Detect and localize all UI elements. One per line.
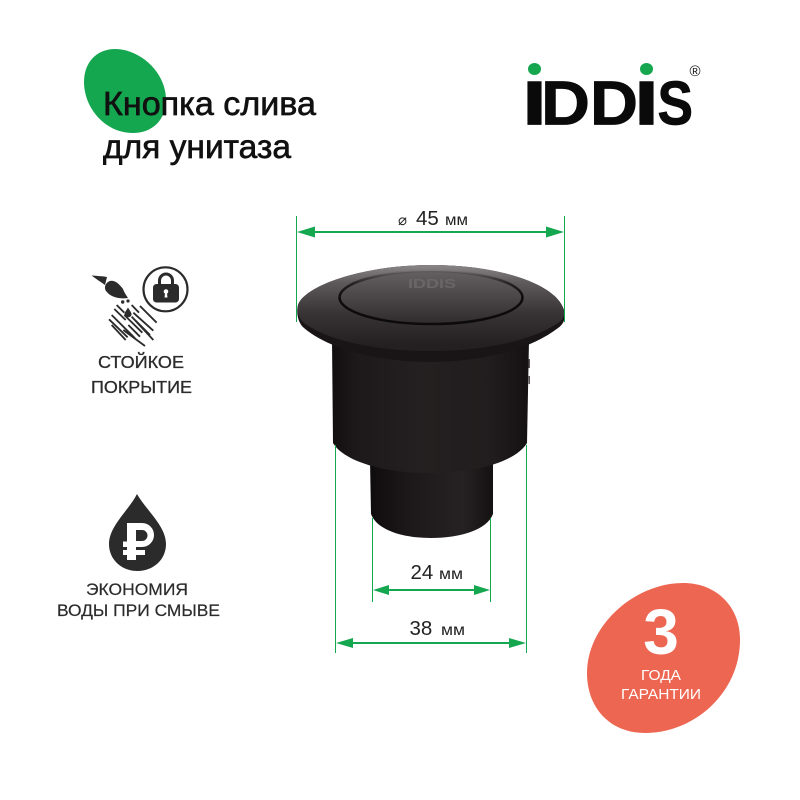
logo wordmark: D	[590, 70, 638, 138]
warranty text: ГАРАНТИИ	[621, 686, 701, 703]
logo green dots	[528, 63, 653, 75]
logo wordmark: I	[634, 70, 659, 138]
logo wordmark: S	[658, 70, 693, 138]
label: мм	[445, 212, 468, 229]
label	[410, 561, 463, 584]
flange underside	[297, 265, 565, 362]
logo: IDDIS	[522, 63, 701, 138]
paint hatching	[109, 305, 157, 346]
label: ⌀	[398, 212, 407, 229]
label: 38	[410, 617, 432, 640]
logo wordmark	[522, 70, 693, 138]
feature: durable coating	[91, 267, 192, 397]
dimension: 45 mm	[296, 207, 564, 322]
body side notches	[528, 359, 530, 384]
feature label	[91, 351, 192, 397]
registered mark: ®	[689, 63, 701, 80]
arrow	[336, 638, 526, 648]
title text	[103, 86, 316, 166]
label: 45	[416, 207, 439, 230]
warranty text	[621, 667, 701, 703]
title text: для унитаза	[103, 129, 291, 166]
logo wordmark: I	[522, 70, 547, 138]
warranty number: 3	[643, 596, 679, 668]
lower stem	[370, 460, 493, 538]
label	[410, 617, 465, 640]
label: 24	[410, 561, 433, 584]
extension lines	[372, 518, 490, 602]
feature label: СТОЙКОЕ	[98, 351, 184, 372]
arrow	[297, 226, 564, 238]
arrow	[373, 585, 490, 595]
dimension: 24 mm	[372, 518, 490, 602]
feature label	[57, 580, 220, 620]
lock in circle	[144, 267, 188, 311]
icon: brush and lock	[92, 267, 188, 346]
logo wordmark: D	[541, 70, 590, 138]
icon: drop with ruble	[109, 494, 166, 571]
feature label: ВОДЫ ПРИ СМЫВЕ	[57, 601, 220, 620]
feature label: ПОКРЫТИЕ	[91, 377, 192, 397]
push cap	[340, 271, 522, 324]
label: мм	[441, 622, 465, 639]
feature: water saving	[57, 494, 220, 620]
extension lines	[336, 445, 526, 653]
label	[398, 207, 468, 230]
green blob	[84, 49, 166, 133]
main body	[332, 340, 529, 473]
label: мм	[439, 566, 463, 583]
extension lines	[296, 216, 564, 322]
dimension: 38 mm	[336, 445, 526, 653]
warranty badge	[587, 583, 740, 733]
coral blob	[587, 583, 740, 733]
warranty text: ГОДА	[641, 667, 681, 684]
title text: Кнопка слива	[103, 86, 316, 123]
feature label: ЭКОНОМИЯ	[86, 580, 188, 599]
product: flush button	[297, 265, 565, 538]
cap logo: IDDIS	[408, 276, 456, 291]
flange top	[298, 265, 564, 351]
brush	[92, 276, 132, 317]
title with green blob	[84, 49, 316, 166]
